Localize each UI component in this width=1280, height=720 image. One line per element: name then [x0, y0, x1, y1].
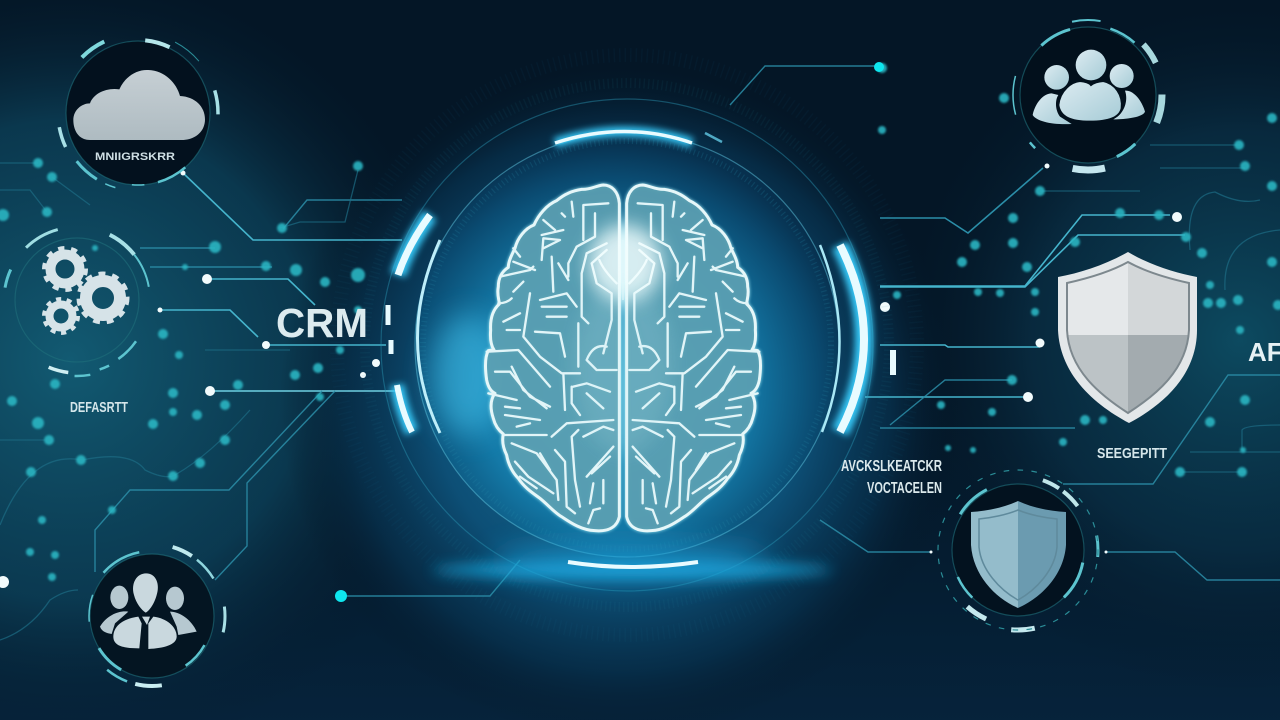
team icon ring [1013, 20, 1163, 170]
icon: team [1033, 50, 1145, 124]
vocabulary label [841, 458, 942, 497]
large security shield icon [1058, 252, 1197, 423]
top glowing arc [555, 132, 722, 143]
gears label: DEFASRTT [70, 399, 128, 416]
CRM label: CRM [276, 300, 368, 346]
small shield icon ring [938, 470, 1098, 630]
security label: SEEGEPITT [1097, 445, 1167, 462]
brain core glow [573, 225, 673, 453]
right glowing arc [820, 245, 893, 432]
gears icon ring [1, 224, 153, 376]
brain [486, 185, 760, 531]
people icon ring [79, 543, 225, 689]
vocabulary label: VOCTACELEN [867, 480, 942, 497]
icon: shield [971, 501, 1066, 608]
left hemisphere [486, 185, 619, 531]
icon: cloud [73, 70, 205, 140]
network nodes [0, 62, 1280, 602]
circuit lines [0, 66, 1280, 640]
right hemisphere [627, 185, 760, 531]
bottom glowing arc [432, 544, 832, 577]
icon: business people [100, 573, 197, 649]
cloud icon ring [58, 33, 218, 193]
central hologram rings [337, 55, 917, 635]
left glowing arc [388, 215, 440, 433]
vocabulary label: AVCKSLKEATCKR [841, 458, 942, 475]
cloud label: MNIIGRSKRR [95, 151, 175, 163]
icon: gears [44, 249, 126, 332]
